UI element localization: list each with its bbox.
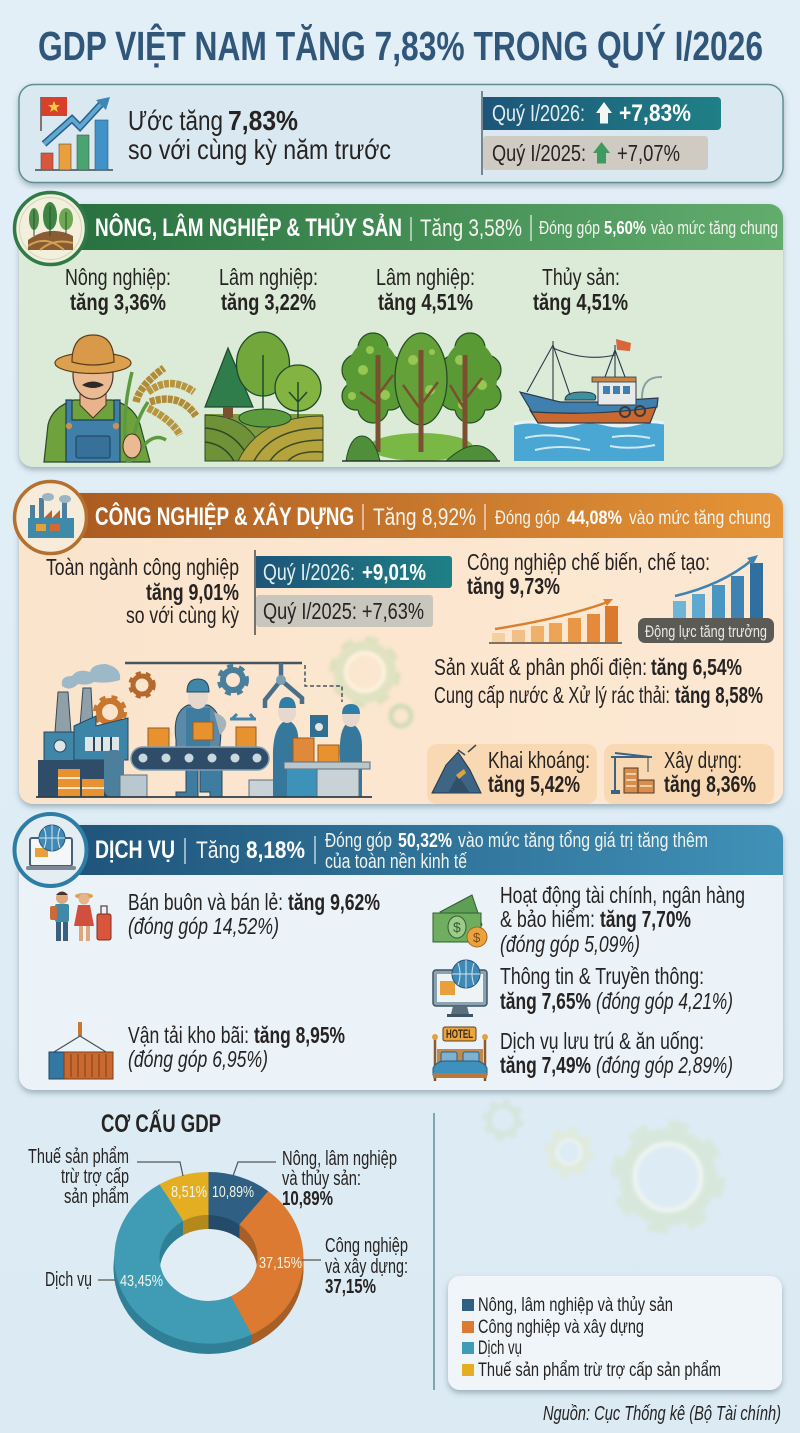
panel: services bbox=[14, 814, 783, 1090]
text: whole industry growth: Toàn ngành công nghiệp bbox=[46, 554, 239, 580]
bar: industry Q1 2025: Quý I/2025: +7,63% bbox=[263, 598, 424, 624]
icon: decorative gears lower right bbox=[485, 1102, 720, 1229]
item: finance, banking and insurance: tăng 7,70% bbox=[600, 906, 691, 932]
text: electricity and water: tăng 6,54% bbox=[651, 654, 742, 680]
section header: industry bbox=[60, 493, 783, 538]
legend bbox=[448, 1276, 782, 1390]
value labels: 37,15% bbox=[259, 1255, 302, 1272]
item: transport and warehousing bbox=[49, 1022, 345, 1079]
slice: services bbox=[114, 1184, 252, 1344]
item: finance, banking and insurance: (đóng góp 5,09%) bbox=[500, 931, 640, 957]
item: wholesale and retail: Bán buôn và bán lẻ: bbox=[128, 889, 283, 915]
callout: industry: Công nghiệp bbox=[325, 1235, 408, 1257]
section header: services bbox=[60, 825, 783, 875]
item: accommodation and food service: tăng 7,49% bbox=[500, 1052, 591, 1078]
item: information and communications: (đóng góp 4,21%) bbox=[596, 988, 733, 1014]
section header: industry: 44,08% bbox=[567, 508, 622, 529]
bar: Q1 2025: Quý I/2025: bbox=[492, 140, 586, 166]
label: agriculture: tăng 3,36% bbox=[70, 289, 166, 315]
panel: agriculture, forestry and fishery bbox=[14, 192, 783, 467]
icon: mining mound bbox=[432, 745, 481, 793]
section header: services: 50,32% bbox=[398, 830, 452, 852]
icon: farmer with rice bbox=[44, 335, 196, 462]
card: mining bbox=[427, 744, 597, 804]
label: growth driver bbox=[638, 618, 774, 643]
callout: industry bbox=[302, 1235, 408, 1298]
item: wholesale and retail: tăng 9,62% bbox=[288, 889, 380, 915]
section header: agriculture: Đóng góp bbox=[539, 218, 600, 238]
card: mining: Khai khoáng: bbox=[488, 747, 590, 773]
item: information and communications: Thông tin & Truyền thông: bbox=[500, 963, 704, 989]
text: manufacturing growth: Công nghiệp chế biến, chế tạo: bbox=[467, 549, 710, 575]
label: forestry second: Lâm nghiệp: bbox=[376, 264, 475, 290]
icon: laptop and globe badge bbox=[14, 814, 86, 886]
slice: industry bbox=[231, 1191, 303, 1335]
text: electricity and water: Sản xuất & phân phối điện: bbox=[434, 654, 647, 680]
item: transport and warehousing: Vận tải kho bãi: bbox=[128, 1022, 249, 1048]
callout: agriculture: 10,89% bbox=[282, 1188, 333, 1210]
item: accommodation and food service: Dịch vụ lưu trú & ăn uống: bbox=[500, 1028, 704, 1054]
section header: industry: CÔNG NGHIỆP & XÂY DỰNG bbox=[95, 501, 354, 531]
legend: Nông, lâm nghiệp và thủy sản bbox=[478, 1295, 673, 1316]
label: forestry: tăng 3,22% bbox=[221, 289, 316, 315]
text: headline growth: 7,83% bbox=[228, 105, 298, 136]
value labels: 43,45% bbox=[120, 1273, 163, 1290]
icon: travellers with suitcase bbox=[50, 892, 111, 941]
section header: services: của toàn nền kinh tế bbox=[325, 851, 467, 873]
icon: shipping container on hook bbox=[49, 1022, 113, 1079]
label: fishery: Thủy sản: bbox=[542, 264, 620, 290]
text: headline growth: Ước tăng bbox=[128, 105, 223, 136]
item: finance, banking and insurance bbox=[433, 882, 745, 957]
card: mining: tăng 5,42% bbox=[488, 771, 580, 797]
section header: industry: Đóng góp bbox=[495, 508, 560, 529]
text: electricity and water: Cung cấp nước & Xử lý rác thải: bbox=[434, 682, 670, 708]
label: forestry second: tăng 4,51% bbox=[378, 289, 473, 315]
label: fishery bbox=[533, 264, 628, 315]
card: construction: tăng 8,36% bbox=[664, 771, 756, 797]
icon: forest bbox=[342, 333, 501, 461]
chart: GDP structure donut bbox=[114, 1172, 304, 1354]
panel: headline summary bbox=[19, 84, 783, 182]
section header: agriculture: Tăng 3,58% bbox=[420, 215, 522, 242]
section header: industry: Tăng 8,92% bbox=[373, 504, 476, 531]
section header: services: 8,18% bbox=[246, 837, 305, 864]
icon: hotel bed: HOTEL bbox=[446, 1027, 473, 1041]
card: construction bbox=[604, 744, 774, 804]
text: headline growth: so với cùng kỳ năm trước bbox=[128, 134, 391, 165]
legend: Công nghiệp và xây dựng bbox=[478, 1317, 644, 1338]
text: manufacturing growth bbox=[467, 549, 710, 599]
icon: growth chart with flag bbox=[35, 97, 113, 170]
bar: industry Q1 2026: Quý I/2026: bbox=[263, 559, 355, 585]
label: fishery: tăng 4,51% bbox=[533, 289, 628, 315]
text: whole industry growth: tăng 9,01% bbox=[146, 579, 239, 605]
callout: agriculture: và thủy sản: bbox=[282, 1168, 361, 1190]
bar: Q1 2025: +7,07% bbox=[617, 140, 680, 166]
item: wholesale and retail: (đóng góp 14,52%) bbox=[128, 913, 279, 939]
text: headline growth bbox=[128, 105, 391, 165]
panel: industry and construction bbox=[14, 482, 783, 804]
icon: crane and building bbox=[611, 753, 654, 794]
icon: monitor and globe bbox=[433, 960, 487, 1017]
callout: taxes bbox=[28, 1146, 183, 1208]
text: electricity and water bbox=[434, 654, 763, 708]
slice: agriculture bbox=[208, 1172, 268, 1225]
callout: industry: 37,15% bbox=[325, 1276, 376, 1298]
value labels bbox=[120, 1184, 302, 1290]
icon: decorative gears bbox=[334, 641, 411, 726]
icon: banknotes and coin: $ bbox=[453, 919, 461, 935]
icon: farm badge bbox=[14, 192, 86, 264]
callout: taxes: sản phẩm bbox=[64, 1186, 129, 1208]
item: accommodation and food service bbox=[432, 1027, 733, 1081]
callout: taxes: Thuế sản phẩm bbox=[28, 1146, 129, 1168]
illustration: factory and workers bbox=[36, 663, 372, 797]
label: agriculture bbox=[65, 264, 171, 315]
callout: taxes: trừ trợ cấp bbox=[61, 1166, 129, 1188]
icon: trees and fields bbox=[205, 332, 323, 461]
bar: Q1 2026: +7,83% bbox=[619, 100, 691, 127]
callout: agriculture bbox=[233, 1148, 397, 1210]
text: electricity and water: tăng 8,58% bbox=[675, 682, 763, 708]
item: transport and warehousing: (đóng góp 6,95%) bbox=[128, 1046, 268, 1072]
text: whole industry growth bbox=[46, 554, 239, 628]
item: information and communications: tăng 7,65% bbox=[500, 988, 591, 1014]
section header: agriculture: 5,60% bbox=[604, 218, 646, 238]
item: finance, banking and insurance: & bảo hiểm: bbox=[500, 906, 595, 932]
section header: services: DỊCH VỤ bbox=[95, 836, 175, 864]
section header: services: Tăng bbox=[196, 837, 240, 864]
icon: banknotes and coin: $ bbox=[473, 930, 481, 945]
section header: industry: vào mức tăng chung bbox=[629, 508, 771, 529]
label: forestry bbox=[219, 264, 318, 315]
card: construction: Xây dựng: bbox=[664, 747, 742, 773]
value labels: 8,51% bbox=[171, 1184, 207, 1201]
icon: banknotes and coin bbox=[433, 895, 487, 947]
slice: taxes bbox=[160, 1172, 208, 1221]
icon: fishing boat bbox=[514, 339, 664, 461]
bar: industry Q1 2025 bbox=[256, 595, 433, 627]
chart: orange rising bars bbox=[489, 599, 622, 643]
bar: industry Q1 2026 bbox=[256, 556, 452, 588]
legend: Thuế sản phẩm trừ trợ cấp sản phẩm bbox=[478, 1360, 721, 1381]
item: transport and warehousing: tăng 8,95% bbox=[254, 1022, 345, 1048]
callout: services: Dịch vụ bbox=[45, 1269, 92, 1291]
callout: agriculture: Nông, lâm nghiệp bbox=[282, 1148, 397, 1170]
text: manufacturing growth: tăng 9,73% bbox=[467, 573, 560, 599]
chart: blue rising bars bbox=[673, 555, 763, 620]
label: agriculture: Nông nghiệp: bbox=[65, 264, 171, 290]
section header: services: vào mức tăng tổng giá trị tăng thêm bbox=[458, 830, 708, 852]
section header: services: Đóng góp bbox=[325, 830, 392, 852]
heading: GDP structure: CƠ CẤU GDP bbox=[101, 1109, 221, 1138]
bar: Q1 2025 bbox=[483, 136, 708, 170]
callout: industry: và xây dựng: bbox=[325, 1256, 408, 1278]
bar: Q1 2026 bbox=[483, 97, 721, 130]
section header: agriculture: NÔNG, LÂM NGHIỆP & THỦY SẢN bbox=[95, 212, 402, 242]
label: forestry second bbox=[376, 264, 475, 315]
section header: agriculture bbox=[60, 204, 783, 250]
item: accommodation and food service: (đóng góp 2,89%) bbox=[596, 1052, 733, 1078]
bar: Q1 2026: Quý I/2026: bbox=[492, 100, 585, 126]
icon: hotel bed bbox=[432, 1027, 488, 1081]
text: whole industry growth: so với cùng kỳ bbox=[126, 602, 239, 628]
item: wholesale and retail bbox=[50, 889, 380, 941]
icon: factory badge bbox=[14, 482, 86, 554]
bar: industry Q1 2026: +9,01% bbox=[362, 559, 426, 585]
value labels: 10,89% bbox=[212, 1184, 254, 1201]
label: forestry: Lâm nghiệp: bbox=[219, 264, 318, 290]
item: information and communications bbox=[433, 960, 733, 1017]
legend: Dịch vụ bbox=[478, 1338, 522, 1359]
